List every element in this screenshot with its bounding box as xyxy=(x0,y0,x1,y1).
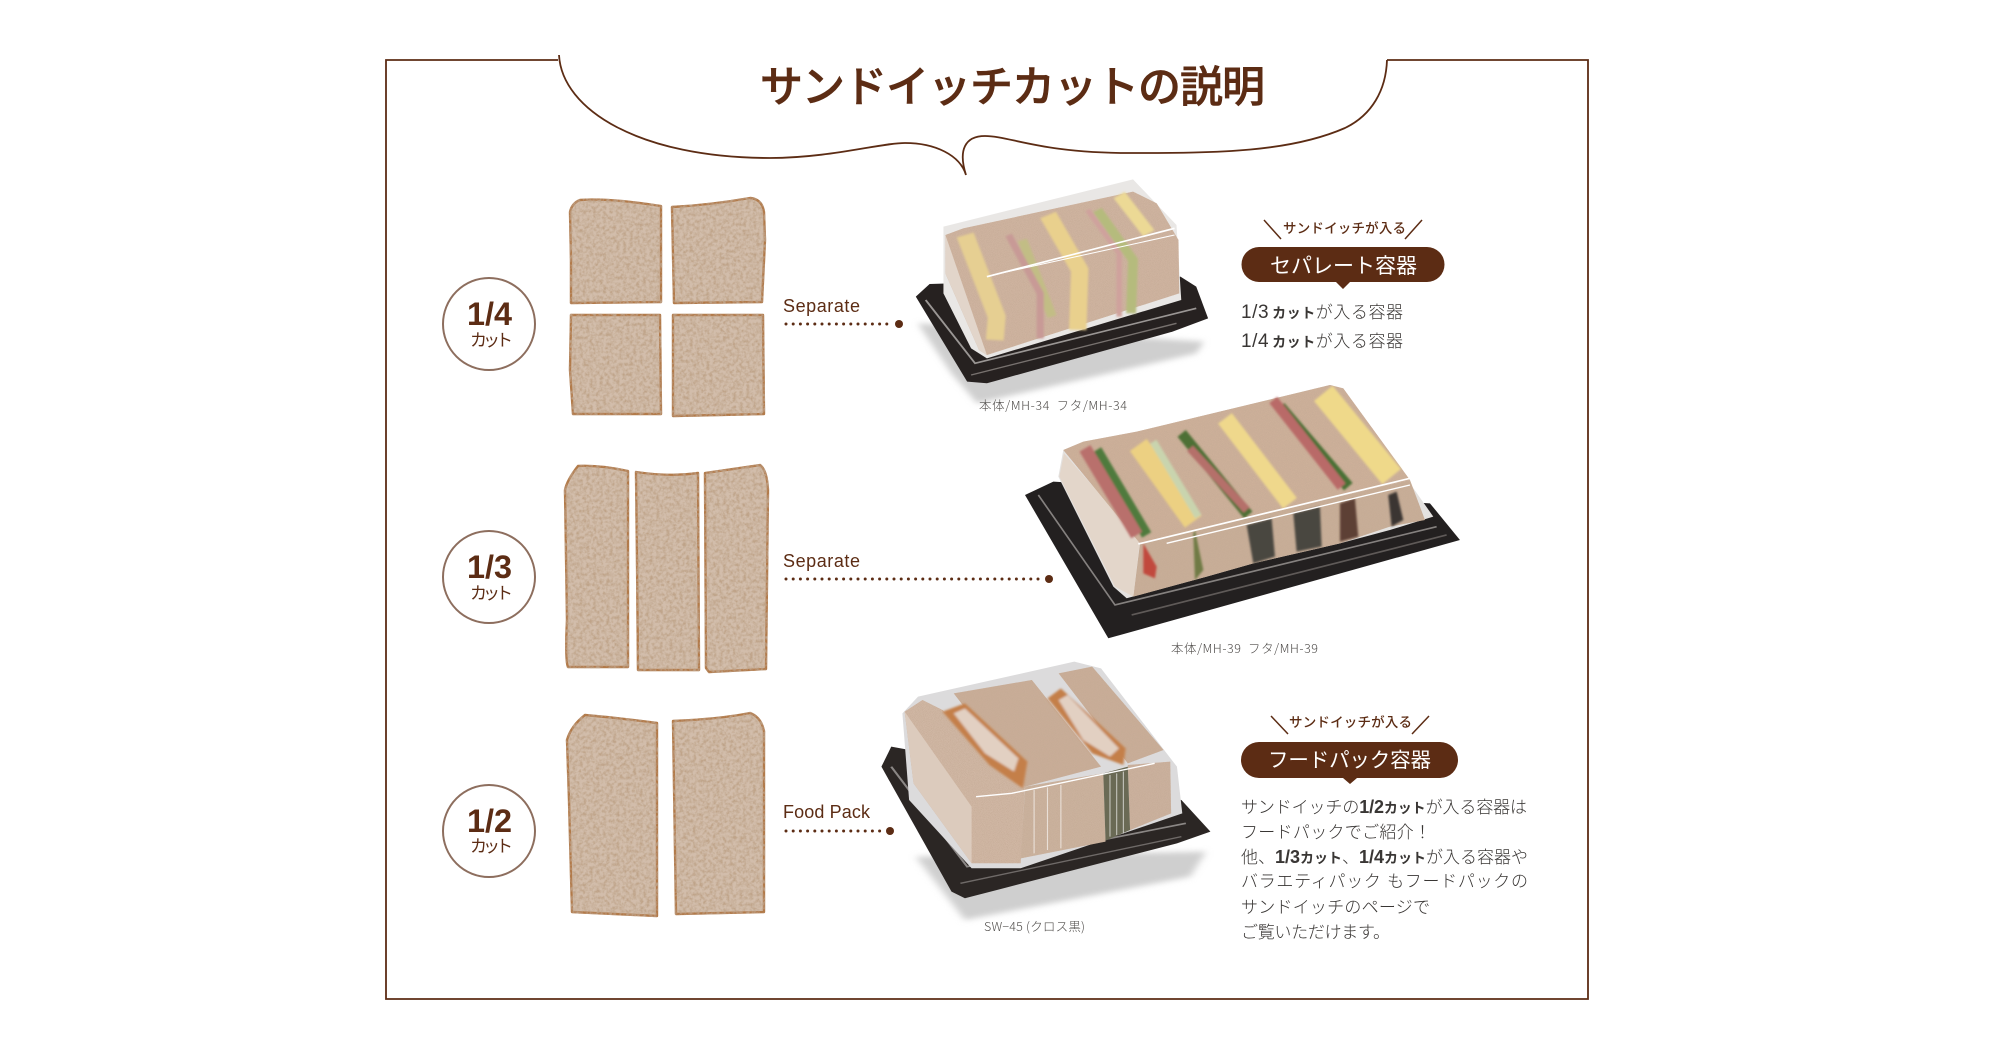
line: sandwich enters: サンドイッチが入る xyxy=(1283,217,1406,237)
label and leader: Separate: Separate xyxy=(783,551,860,571)
row: 1/3 cut xyxy=(443,385,1460,672)
label and leader: Separate xyxy=(783,296,903,328)
text: food pack description: 他、1/3カット、1/4カットが入る容器や xyxy=(1241,847,1528,867)
food pack container description xyxy=(1241,711,1528,942)
text: food pack description: バラエティパック もフードパックの xyxy=(1241,872,1528,891)
caption: MH-34: 本体/MH-34 フタ/MH-34 xyxy=(979,395,1127,414)
pill: food pack container xyxy=(1241,742,1458,784)
badge: 1/4 cut: カット xyxy=(470,326,513,351)
text: container fits: 1/4 カットが入る容器 xyxy=(1241,331,1403,352)
text: food pack description: サンドイッチの1/2カットが入る容器は xyxy=(1241,797,1527,817)
bread cut in halves xyxy=(567,713,764,916)
row: 1/4 cut xyxy=(443,179,1208,416)
pill: food pack container: フードパック容器 xyxy=(1268,743,1432,773)
text: container fits xyxy=(1241,302,1403,352)
text: container fits: 1/3 カットが入る容器 xyxy=(1241,302,1403,323)
photo: SW-45 container xyxy=(881,662,1210,920)
pill: separate container: セパレート容器 xyxy=(1270,250,1417,280)
text: food pack description xyxy=(1241,797,1528,942)
photo: MH-39 container xyxy=(1025,385,1460,638)
label and leader: Separate xyxy=(783,551,1053,583)
frame and speech bubble outline xyxy=(386,55,1588,999)
line: sandwich enters: サンドイッチが入る xyxy=(1289,711,1412,731)
text: food pack description: サンドイッチのページで xyxy=(1241,898,1430,917)
badge: 1/2 cut xyxy=(443,785,535,877)
photo: MH-34 container xyxy=(916,179,1208,403)
bread cut in quarters xyxy=(570,198,765,416)
title: サンドイッチカットの説明 xyxy=(760,53,1265,115)
badge: 1/2 cut: 1/2 xyxy=(467,803,512,839)
badge: 1/3 cut: 1/3 xyxy=(467,549,512,585)
label and leader: Food Pack xyxy=(783,802,894,835)
badge: 1/2 cut: カット xyxy=(470,832,513,857)
label and leader: Separate: Separate xyxy=(783,296,860,316)
caption: MH-39: 本体/MH-39 フタ/MH-39 xyxy=(1171,638,1318,657)
caption: SW-45: SW−45 (クロス黒) xyxy=(984,916,1085,935)
label and leader: Food Pack: Food Pack xyxy=(783,802,871,822)
badge: 1/3 cut xyxy=(443,531,535,623)
line: sandwich enters xyxy=(1271,711,1429,734)
separate container description xyxy=(1241,217,1444,352)
pill: separate container xyxy=(1242,247,1444,289)
text: food pack description: フードパックでご紹介！ xyxy=(1241,823,1431,842)
badge: 1/4 cut: 1/4 xyxy=(467,296,512,332)
row: 1/2 cut xyxy=(443,662,1210,935)
badge: 1/3 cut: カット xyxy=(470,579,513,604)
bread cut in thirds xyxy=(565,465,768,672)
text: food pack description: ご覧いただけます。 xyxy=(1241,923,1390,942)
badge: 1/4 cut xyxy=(443,278,535,370)
